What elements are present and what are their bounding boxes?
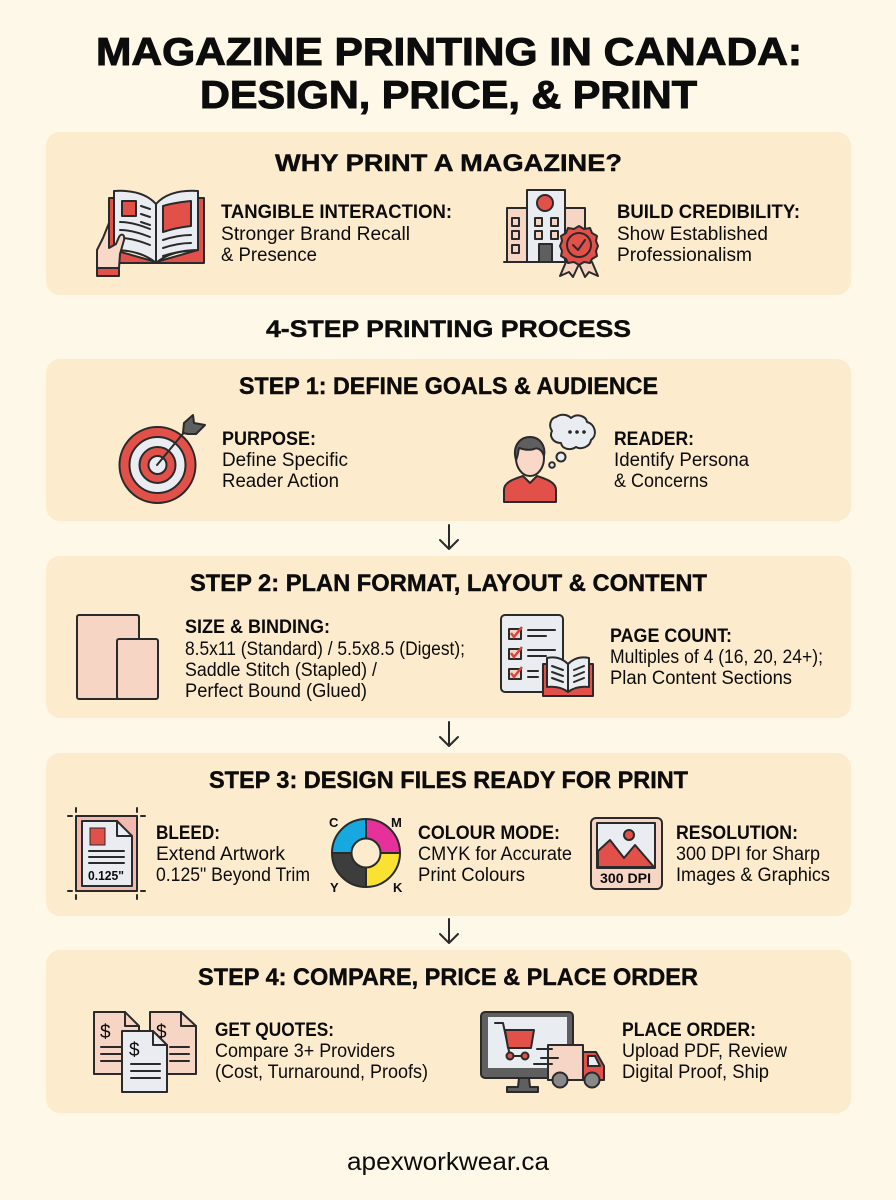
- text: colour mode: [418, 823, 572, 886]
- text: resolution: RESOLUTION:: [676, 823, 798, 844]
- icon: CMYK colour wheel: K: [393, 880, 403, 895]
- arrow: step 2 to 3: [440, 722, 458, 746]
- text: bleed: BLEED:: [156, 823, 220, 844]
- text: bleed: [156, 823, 310, 886]
- icon: CMYK colour wheel: [329, 815, 403, 895]
- text: place order: Digital Proof, Ship: [622, 1062, 769, 1083]
- panel: step 4: [46, 950, 851, 1113]
- text: purpose: [222, 429, 348, 492]
- text: place order: PLACE ORDER:: [622, 1020, 756, 1041]
- text: build credibility: Professionalism: [617, 245, 752, 266]
- heading: why print: WHY PRINT A MAGAZINE?: [275, 150, 622, 177]
- text: get quotes: GET QUOTES:: [215, 1020, 334, 1041]
- text: page count: Multiples of 4 (16, 20, 24+);: [610, 647, 823, 668]
- footer: website: apexworkwear.ca: [347, 1148, 549, 1176]
- icon: 300 DPI image: [591, 818, 662, 889]
- text: build credibility: Show Established: [617, 224, 768, 245]
- text: page count: PAGE COUNT:: [610, 626, 732, 647]
- icon: 300 DPI image: 300 DPI: [600, 871, 651, 886]
- icon: target with arrow: [120, 415, 205, 503]
- text: reader: Identify Persona: [614, 450, 749, 471]
- icon: monitor cart and truck: [481, 1012, 604, 1092]
- text: size and binding: [185, 617, 465, 702]
- heading: step 3: STEP 3: DESIGN FILES READY FOR PRINT: [209, 767, 688, 794]
- icon: CMYK colour wheel: M: [391, 815, 402, 830]
- text: colour mode: Print Colours: [418, 865, 525, 886]
- arrow: step 1 to 2: [440, 525, 458, 549]
- title: [96, 31, 802, 117]
- text: tangible interaction: Stronger Brand Recall: [221, 224, 410, 245]
- text: get quotes: (Cost, Turnaround, Proofs): [215, 1062, 428, 1083]
- text: colour mode: COLOUR MODE:: [418, 823, 560, 844]
- arrow: step 3 to 4: [440, 919, 458, 943]
- text: reader: & Concerns: [614, 471, 708, 492]
- text: size and binding: Perfect Bound (Glued): [185, 681, 367, 702]
- text: size and binding: 8.5x11 (Standard) / 5.5x8.5 (Digest);: [185, 639, 465, 660]
- icon: building with badge: [504, 190, 598, 277]
- title: MAGAZINE PRINTING IN CANADA:: [96, 31, 802, 74]
- text: purpose: Define Specific: [222, 450, 348, 471]
- text: bleed: 0.125" Beyond Trim: [156, 865, 310, 886]
- icon: quote documents: $: [129, 1040, 140, 1061]
- icon: quote documents: $: [100, 1022, 111, 1043]
- text: resolution: [676, 823, 830, 886]
- text: place order: [622, 1020, 787, 1083]
- icon: CMYK colour wheel: C: [329, 815, 339, 830]
- text: tangible interaction: TANGIBLE INTERACTION:: [221, 202, 452, 223]
- text: bleed: Extend Artwork: [156, 844, 286, 865]
- heading: step 2: STEP 2: PLAN FORMAT, LAYOUT & CONTENT: [190, 570, 707, 597]
- text: reader: READER:: [614, 429, 694, 450]
- icon: quote documents: $: [156, 1022, 167, 1043]
- icon: page sizes: [77, 615, 158, 699]
- text: page count: Plan Content Sections: [610, 668, 792, 689]
- text: resolution: 300 DPI for Sharp: [676, 844, 820, 865]
- title: DESIGN, PRICE, & PRINT: [200, 74, 697, 117]
- text: tangible interaction: & Presence: [221, 245, 317, 266]
- text: build credibility: BUILD CREDIBILITY:: [617, 202, 800, 223]
- icon: bleed document: [68, 808, 145, 899]
- text: get quotes: [215, 1020, 428, 1083]
- icon: reader with thought bubble: [504, 415, 595, 502]
- text: get quotes: Compare 3+ Providers: [215, 1041, 395, 1062]
- section heading: 4-step process: 4-STEP PRINTING PROCESS: [266, 316, 631, 343]
- text: purpose: PURPOSE:: [222, 429, 316, 450]
- text: tangible interaction: [221, 202, 452, 266]
- icon: bleed document: 0.125": [88, 869, 124, 883]
- text: reader: [614, 429, 749, 492]
- heading: step 1: STEP 1: DEFINE GOALS & AUDIENCE: [239, 373, 658, 400]
- text: size and binding: SIZE & BINDING:: [185, 617, 330, 638]
- heading: step 4: STEP 4: COMPARE, PRICE & PLACE ORDER: [198, 964, 698, 991]
- icon: checklist and book: [501, 615, 593, 696]
- icon: quote documents: [94, 1012, 196, 1092]
- icon: CMYK colour wheel: Y: [330, 880, 339, 895]
- text: size and binding: Saddle Stitch (Stapled) /: [185, 660, 378, 681]
- text: purpose: Reader Action: [222, 471, 339, 492]
- icon: open book with hand: [97, 191, 204, 276]
- panel: step 3: [46, 753, 851, 916]
- panel: why print a magazine: [46, 132, 851, 295]
- text: place order: Upload PDF, Review: [622, 1041, 787, 1062]
- text: build credibility: [617, 202, 800, 266]
- text: page count: [610, 626, 823, 689]
- text: colour mode: CMYK for Accurate: [418, 844, 572, 865]
- text: resolution: Images & Graphics: [676, 865, 830, 886]
- panel: step 2: [46, 556, 851, 718]
- panel: step 1: [46, 359, 851, 521]
